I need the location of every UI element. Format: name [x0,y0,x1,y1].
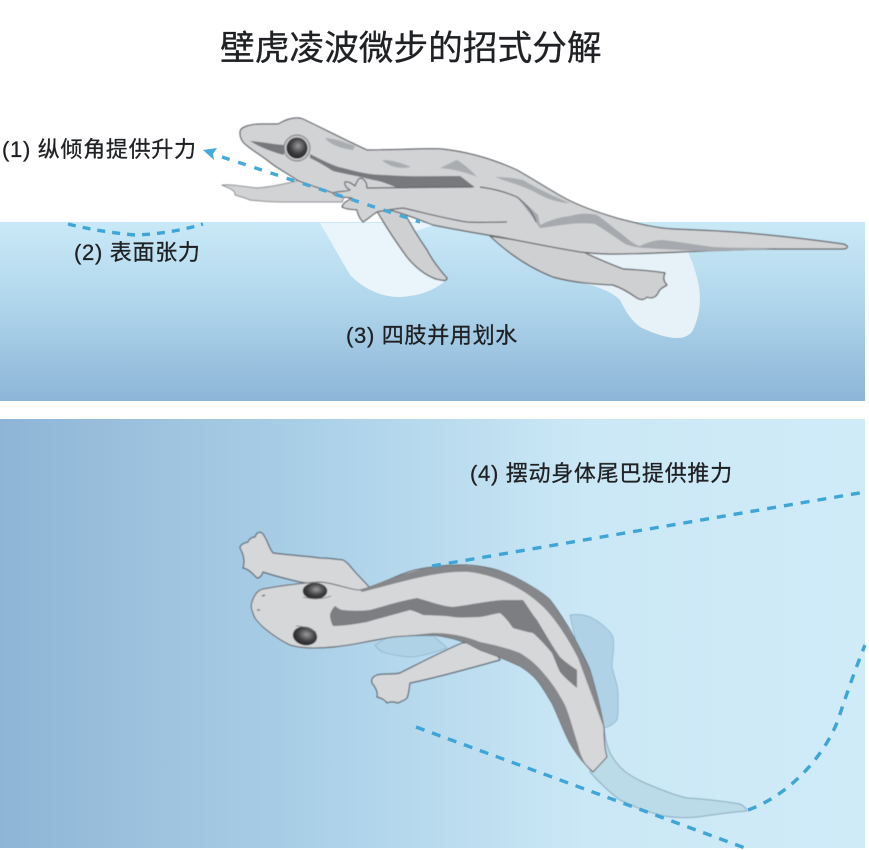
panel: top view water [0,419,865,848]
upper arm [240,532,372,592]
body stripe [310,154,475,190]
upper body dark margin [360,566,604,728]
thrust dashes [416,492,865,848]
eye: lower [291,625,319,647]
arrow: trim angle lift [203,148,420,222]
front leg [375,208,447,280]
title: 壁虎凌波微步的招式分解 [220,29,602,68]
label 1: (1) 纵倾角提供升力 [2,137,197,162]
label 2: (2) 表面张力 [74,240,201,265]
splash: front leg [320,223,444,297]
hind leg [490,236,667,300]
back spots [325,138,570,203]
eye [284,135,310,161]
blue side membrane [375,615,618,728]
limb outline [333,178,536,222]
side-view gecko [222,118,847,300]
nostrils [257,595,265,610]
splash: hind leg [545,245,700,338]
eye: upper [303,583,331,599]
body [251,565,607,772]
surface tension dashes [68,224,203,235]
head stripe [250,141,284,155]
panel: side view water [0,222,865,401]
flank stripe [517,197,780,251]
hand and upper limb [333,178,536,222]
label 4: (4) 摆动身体尾巴提供推力 [470,461,733,486]
lower body dark margin [393,633,592,772]
label 3: (3) 四肢并用划水 [346,323,518,348]
dorsal stripe [330,598,577,688]
forward arm [222,180,345,202]
body [240,118,847,254]
top-view gecko [240,532,747,818]
lower arm [372,640,500,703]
tail [590,728,747,818]
